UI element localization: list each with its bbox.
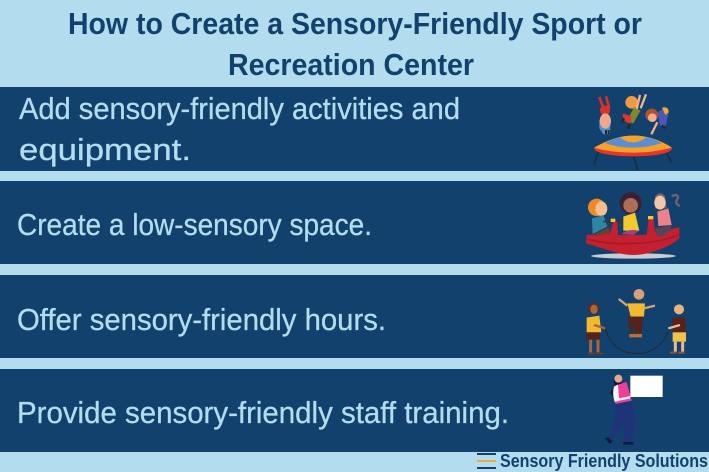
icon: children on seesaw [586,192,680,259]
text: activities and equipment [19,91,460,167]
icon: children with jump rope [586,289,686,354]
icon: three-line logo [477,453,496,469]
text: activities and equipment: Add sensory-friendly activities and [19,91,460,126]
text: staff training: Provide sensory-friendly staff training. [17,395,509,430]
title: How to Create a Sensory-Friendly Sport or [68,6,642,41]
text: low-sensory space: Create a low-sensory space. [17,207,372,242]
title: Recreation Center [228,47,474,82]
icon: woman holding blank sign [605,375,663,445]
footer logo: Sensory Friendly Solutions [477,451,708,471]
text: activities and equipment: equipment. [19,132,191,167]
panel: low-sensory space [0,181,709,264]
title [68,6,642,82]
icon: children on trampoline [594,94,672,170]
panel: staff training [0,369,709,452]
panel: sensory-friendly hours [0,275,709,358]
panel: sensory-friendly activities [0,87,709,171]
text: sensory-friendly hours: Offer sensory-friendly hours. [17,302,386,337]
